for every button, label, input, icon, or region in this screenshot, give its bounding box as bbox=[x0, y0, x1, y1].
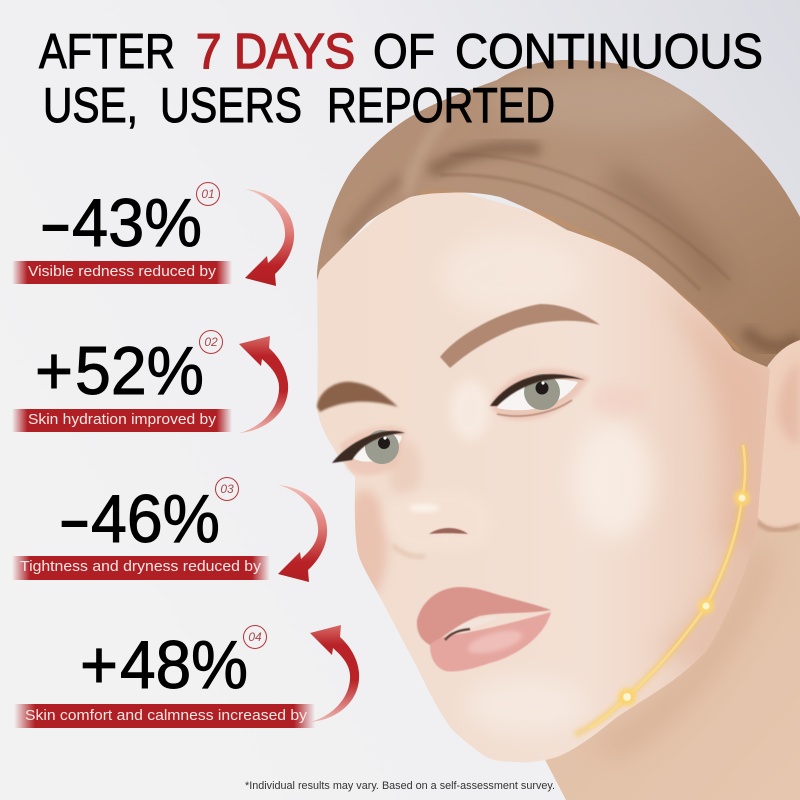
skin shading and highlights bbox=[343, 235, 770, 733]
neck bbox=[540, 500, 800, 800]
badge 04: 04 bbox=[248, 630, 262, 644]
label text: Skin comfort and calmness increased by bbox=[25, 707, 308, 724]
badge 02 bbox=[200, 330, 222, 354]
label bar bbox=[14, 704, 315, 728]
value: - bbox=[39, 185, 72, 261]
parting bbox=[405, 118, 445, 195]
hair top light bbox=[497, 70, 700, 130]
ear bbox=[754, 338, 800, 530]
lips bbox=[417, 587, 551, 672]
left eye bbox=[332, 426, 405, 475]
value: 48% bbox=[120, 627, 248, 703]
stat 3: tightness bbox=[12, 478, 327, 582]
badge 03 bbox=[216, 478, 238, 500]
face skin bbox=[317, 180, 770, 762]
label bar bbox=[12, 556, 270, 580]
label text: Skin hydration improved by bbox=[28, 411, 217, 428]
title bbox=[39, 25, 763, 133]
portrait bbox=[310, 50, 800, 800]
value: 52% bbox=[75, 333, 204, 409]
title: 7 DAYS bbox=[196, 25, 355, 79]
title: OF bbox=[373, 25, 435, 79]
title: AFTER bbox=[39, 25, 175, 79]
value: 46% bbox=[91, 481, 220, 557]
badge 03: 03 bbox=[220, 482, 234, 496]
stat 2: hydration bbox=[12, 330, 288, 433]
label bar bbox=[12, 409, 232, 432]
hair bbox=[310, 50, 800, 380]
badge 01 bbox=[196, 182, 220, 206]
golden contour line bbox=[575, 445, 750, 735]
jaw shadow on neck bbox=[590, 540, 775, 760]
arrow down bbox=[278, 485, 327, 582]
badge 04 bbox=[244, 626, 266, 648]
value: 43% bbox=[72, 185, 202, 261]
dark strands bbox=[430, 148, 540, 172]
stat 4: comfort bbox=[14, 625, 359, 728]
title: USE, bbox=[43, 79, 138, 133]
right eyebrow bbox=[440, 304, 600, 368]
left eyebrow bbox=[317, 382, 398, 412]
arrow down bbox=[245, 189, 294, 286]
warm hairline bbox=[420, 192, 740, 352]
label text: Tightness and dryness reduced by bbox=[20, 558, 262, 575]
value: - bbox=[58, 481, 91, 557]
right eye bbox=[490, 369, 590, 420]
badge 01: 01 bbox=[201, 187, 215, 201]
stat 1: redness bbox=[12, 182, 294, 286]
value: + bbox=[80, 627, 118, 703]
badge 02: 02 bbox=[204, 335, 218, 349]
label bar bbox=[12, 261, 232, 284]
arrow up bbox=[310, 625, 359, 722]
title: REPORTED bbox=[327, 79, 555, 133]
title: CONTINUOUS bbox=[455, 25, 763, 79]
footnote: *Individual results may vary. Based on a self-assessment survey. bbox=[245, 780, 555, 792]
arrow up bbox=[239, 336, 288, 433]
nostril bbox=[429, 528, 468, 534]
label text: Visible redness reduced by bbox=[28, 263, 217, 280]
nose bbox=[383, 490, 492, 557]
title: USERS bbox=[160, 79, 302, 133]
value: + bbox=[35, 333, 73, 409]
